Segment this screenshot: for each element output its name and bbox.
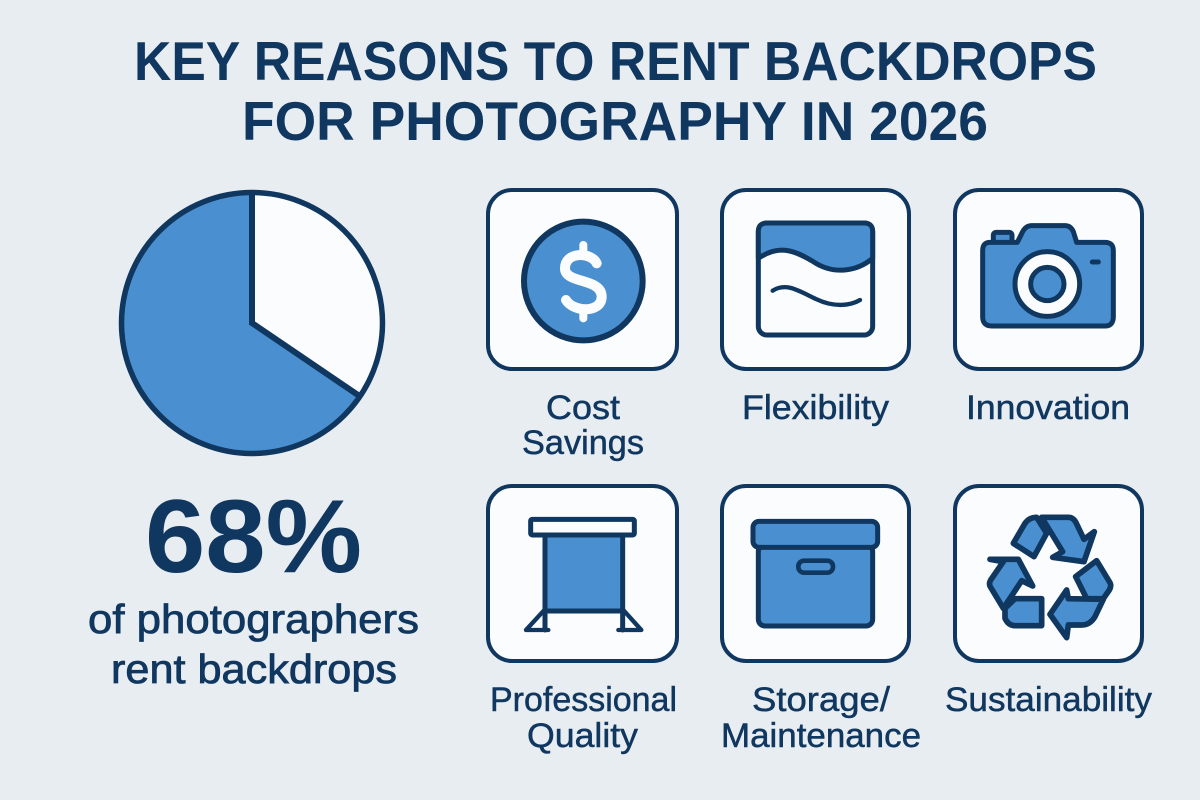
label: professional quality: Quality <box>527 717 638 755</box>
card frame <box>488 486 677 661</box>
icon: backdrop stand <box>526 519 641 630</box>
label: storage and maintenance: Maintenance <box>721 717 921 755</box>
card frame <box>955 190 1142 369</box>
card frame <box>722 486 909 661</box>
label: cost savings: Cost <box>546 389 621 427</box>
label: storage and maintenance: Storage/ <box>752 681 891 719</box>
statistic caption: rent backdrops <box>111 646 397 692</box>
panel: flexibility <box>722 190 909 427</box>
icon: recycling arrows <box>989 517 1111 638</box>
icon: dollar coin <box>524 222 643 340</box>
pie chart: 68 percent <box>122 192 383 454</box>
label: flexibility: Flexibility <box>742 389 889 427</box>
label: professional quality: Professional <box>490 681 677 719</box>
statistic caption: of photographers <box>88 596 419 642</box>
title <box>134 30 1097 152</box>
panel: storage and maintenance <box>721 486 921 755</box>
panel: innovation <box>955 190 1142 427</box>
icon: backdrop waves <box>758 223 873 335</box>
label: cost savings: Savings <box>522 424 644 462</box>
title: FOR PHOTOGRAPHY IN 2026 <box>242 90 988 152</box>
card frame <box>722 190 909 369</box>
icon: camera <box>983 226 1113 326</box>
title: KEY REASONS TO RENT BACKDROPS <box>134 30 1097 92</box>
statistic caption <box>88 596 419 692</box>
panel: professional quality <box>488 486 677 755</box>
label: sustainability: Sustainability <box>945 681 1152 719</box>
label: storage and maintenance <box>721 681 921 755</box>
panel: cost savings <box>488 190 677 462</box>
card frame <box>488 190 677 369</box>
card frame <box>955 486 1142 661</box>
icon: storage box <box>753 521 878 626</box>
label: cost savings <box>522 389 644 462</box>
label: innovation: Innovation <box>966 389 1130 427</box>
panel: sustainability <box>945 486 1152 719</box>
panel: statistic <box>88 192 419 692</box>
label: professional quality <box>490 681 677 755</box>
big number: 68% <box>145 479 362 595</box>
